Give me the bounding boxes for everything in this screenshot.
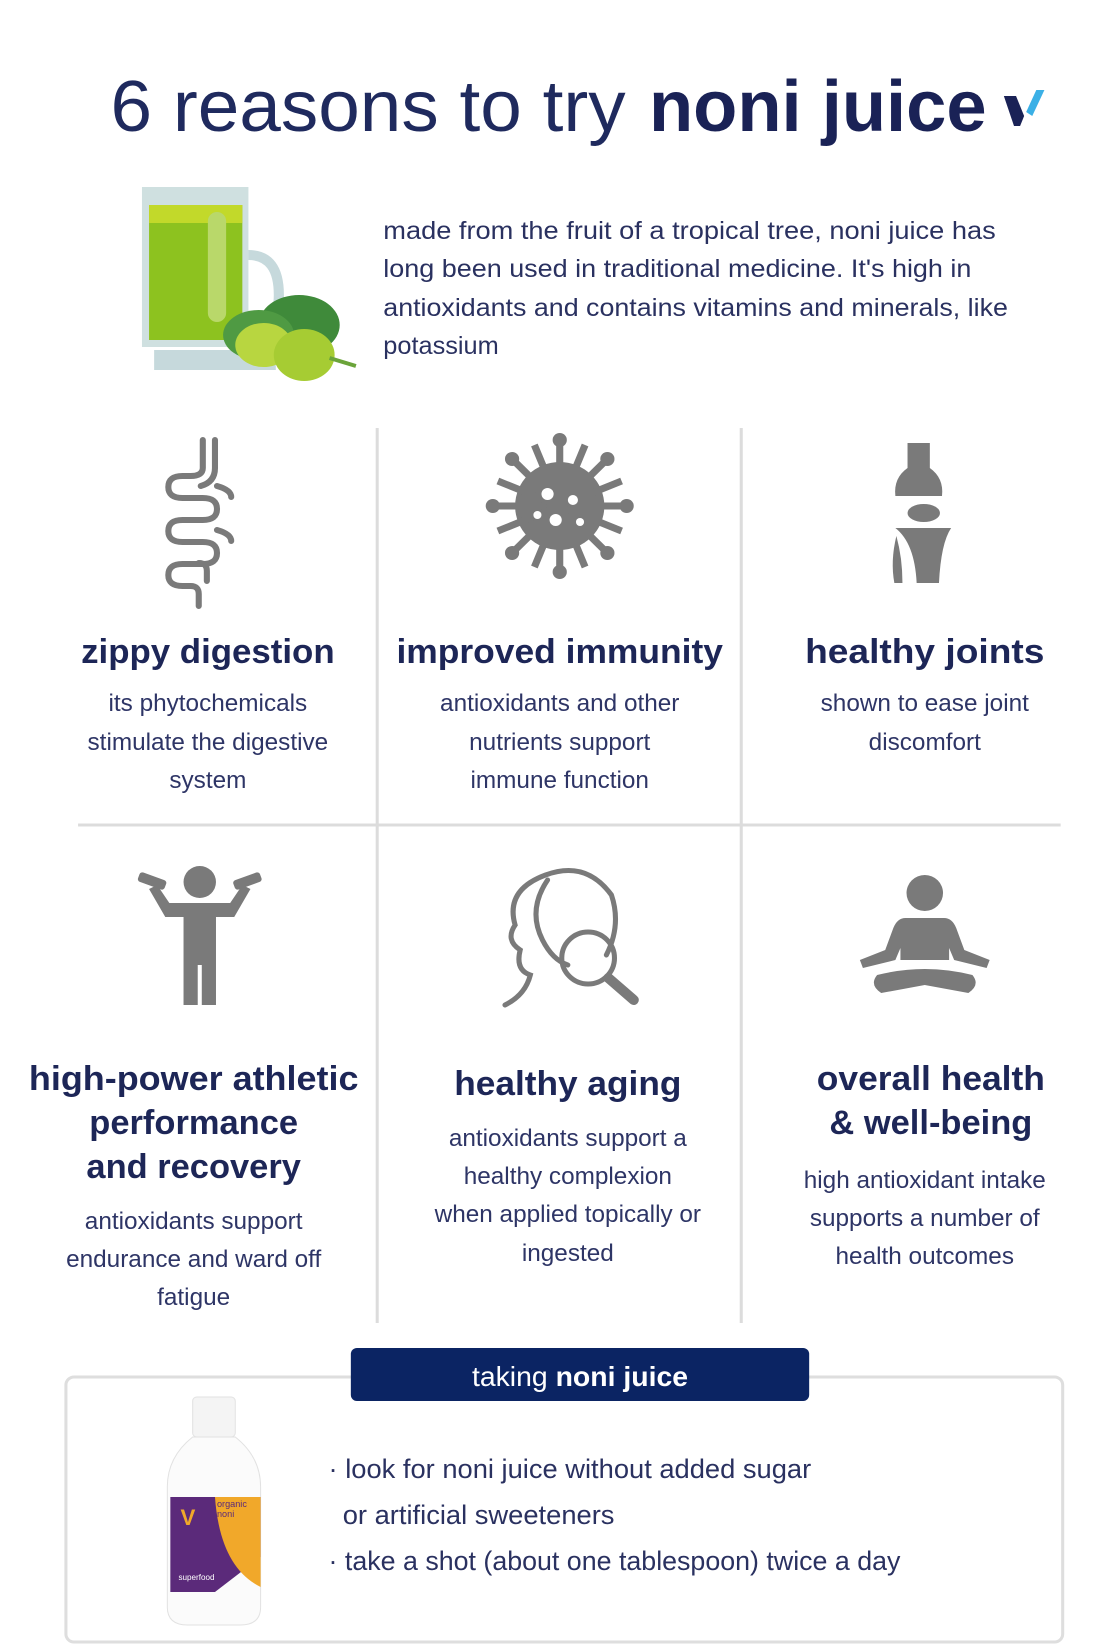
grid lines <box>78 428 1061 1323</box>
panel: improved immunity: improved immunity <box>396 633 723 671</box>
panel: improved immunity: nutrients support <box>469 729 651 756</box>
bullet list: · look for noni juice without added sugar <box>329 1453 811 1484</box>
intro text: long been used in traditional medicine. It's high in <box>383 255 971 283</box>
panel: healthy joints <box>805 443 1044 756</box>
product bottle: organic <box>217 1499 247 1509</box>
panel: healthy joints: shown to ease joint <box>821 690 1029 717</box>
panel: athletic performance <box>29 866 358 1311</box>
panel: healthy aging: ingested <box>522 1240 614 1267</box>
illustration: noni juice glass <box>142 187 356 381</box>
panel: overall health: overall health <box>817 1060 1045 1098</box>
bullet list: · take a shot (about one tablespoon) twice a day <box>329 1545 901 1576</box>
panel: taking noni juice <box>66 1348 1063 1642</box>
product bottle: superfood <box>178 1573 215 1582</box>
intro text <box>383 217 1008 360</box>
panel: athletic performance: antioxidants support <box>85 1208 303 1235</box>
panel: improved immunity: immune function <box>470 767 649 794</box>
panel: zippy digestion: its phytochemicals <box>109 690 307 717</box>
icon: virus <box>486 433 634 579</box>
panel: healthy aging <box>434 870 701 1267</box>
panel: athletic performance: fatigue <box>157 1284 230 1311</box>
panel: overall health: health outcomes <box>836 1243 1014 1270</box>
icon: intestine <box>168 440 231 606</box>
panel: overall health: supports a number of <box>810 1205 1040 1232</box>
panel: overall health <box>804 875 1046 1270</box>
icon: person with dumbbells <box>137 866 262 1005</box>
panel: healthy aging: healthy aging <box>454 1065 681 1103</box>
panel: athletic performance: high-power athletic <box>29 1060 358 1098</box>
bullet list: or artificial sweeteners <box>343 1499 614 1530</box>
bullet list <box>329 1453 901 1576</box>
intro text: potassium <box>383 332 499 360</box>
title: 6 reasons to try <box>111 66 626 147</box>
product bottle: noni <box>217 1509 234 1519</box>
title: noni juice <box>649 66 987 147</box>
panel: athletic performance: performance <box>89 1104 298 1142</box>
icon: face with magnifier <box>505 870 634 1005</box>
panel: overall health: & well-being <box>829 1104 1032 1142</box>
panel: overall health: high antioxidant intake <box>804 1167 1046 1194</box>
intro text: antioxidants and contains vitamins and minerals, like <box>383 294 1008 322</box>
intro text: made from the fruit of a tropical tree, noni juice has <box>383 217 996 245</box>
panel: improved immunity: antioxidants and other <box>440 690 679 717</box>
banner: taking noni juice <box>472 1360 688 1392</box>
panel: zippy digestion: zippy digestion <box>81 633 335 671</box>
panel: healthy aging: when applied topically or <box>434 1201 701 1228</box>
banner <box>351 1348 809 1401</box>
panel: athletic performance: and recovery <box>86 1148 301 1186</box>
icon: brand logo v <box>1004 90 1044 126</box>
panel: healthy aging: antioxidants support a <box>449 1125 687 1152</box>
product bottle: V <box>180 1505 196 1530</box>
panel: zippy digestion: system <box>169 767 246 794</box>
title <box>111 66 987 147</box>
panel: zippy digestion <box>81 440 335 794</box>
panel: zippy digestion: stimulate the digestive <box>88 729 328 756</box>
icon: knee joint <box>893 443 951 583</box>
icon: meditating person <box>860 875 990 993</box>
panel: athletic performance: endurance and ward off <box>66 1246 322 1273</box>
panel: improved immunity <box>396 433 723 794</box>
panel: healthy joints: discomfort <box>869 729 981 756</box>
panel: healthy joints: healthy joints <box>805 633 1044 671</box>
product bottle <box>167 1397 261 1625</box>
panel: healthy aging: healthy complexion <box>464 1163 672 1190</box>
